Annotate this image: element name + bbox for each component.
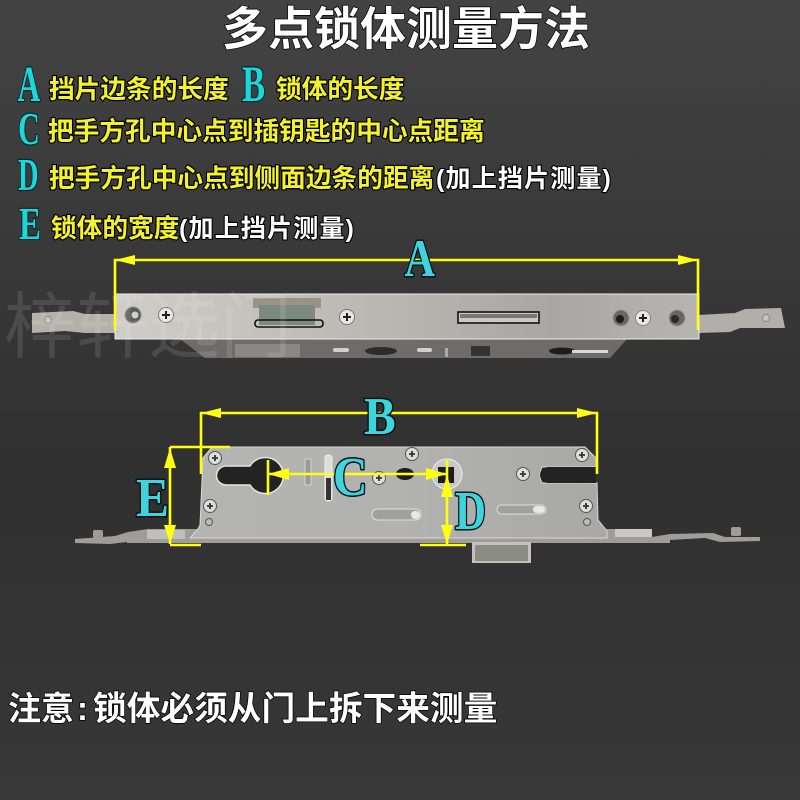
plate right slot dark <box>540 467 596 483</box>
keyhole <box>216 458 283 493</box>
legend row D: (加上挡片测量) <box>436 165 612 193</box>
dimension C: C <box>333 447 368 508</box>
square spindle hole <box>432 459 462 489</box>
dimension B: B <box>364 387 396 446</box>
legend row A and B: A <box>18 57 41 113</box>
dimension D: D <box>455 480 486 541</box>
watermark: 梓轩选门 <box>4 288 292 368</box>
latch below plate <box>472 542 531 563</box>
title: 多点锁体测量方法 <box>222 3 590 55</box>
footer note: : <box>77 690 88 727</box>
bolt slot <box>458 312 539 323</box>
legend row D <box>18 150 612 201</box>
screws and holes <box>44 307 770 326</box>
latch <box>253 298 323 327</box>
small oval hole <box>396 468 414 480</box>
lock plate <box>190 447 607 538</box>
dimension E <box>136 447 230 545</box>
legend row E: (加上挡片测量) <box>179 215 355 243</box>
legend row E: 锁体的宽度 <box>51 214 179 243</box>
right strip <box>698 308 785 333</box>
faceplate <box>115 294 699 339</box>
dimension B <box>201 387 597 474</box>
legend row C: C <box>18 104 40 155</box>
lock body behind faceplate <box>180 339 627 358</box>
legend row A and B: 挡片边条的长度 <box>49 75 229 104</box>
legend row A and B: B <box>242 57 265 113</box>
legend row C <box>18 104 485 155</box>
legend row C: 把手方孔中心点到插钥匙的中心点距离 <box>48 117 485 146</box>
dimension A <box>115 230 698 330</box>
dimension E: E <box>136 468 169 529</box>
legend row E: E <box>19 198 41 249</box>
legend row E <box>19 198 355 249</box>
legend row D: 把手方孔中心点到侧面边条的距离 <box>49 164 434 193</box>
legend: measurement definitions <box>18 57 612 249</box>
dimension A: A <box>404 230 435 288</box>
legend row D: D <box>18 150 39 201</box>
footer note: 注意 <box>8 690 74 727</box>
dimension D <box>420 460 486 545</box>
top lock: face view <box>32 294 785 358</box>
bottom lock: side view <box>75 447 760 563</box>
screws <box>204 448 592 526</box>
bottom rail and tails <box>75 527 760 544</box>
left strip <box>32 311 115 333</box>
dimension C <box>268 447 447 508</box>
vertical slots <box>305 455 332 501</box>
legend row A and B: 锁体的长度 <box>276 75 404 104</box>
footer note: 锁体必须从门上拆下来测量 <box>93 690 497 728</box>
legend row A and B <box>18 57 404 113</box>
horizontal slots <box>372 505 546 520</box>
